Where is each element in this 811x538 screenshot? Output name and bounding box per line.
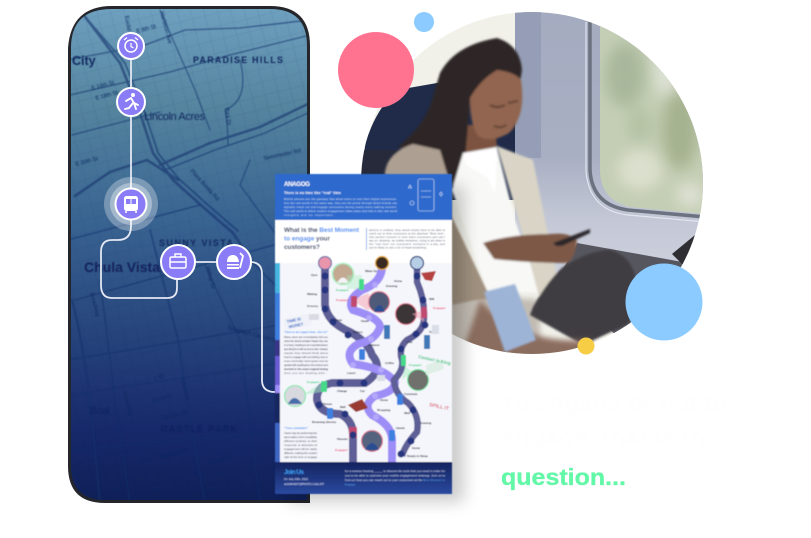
- side paragraph: time available: right at the time to engage: [284, 455, 317, 459]
- side paragraph: when is urgent: "How to let urgent time...fire in!": [284, 330, 329, 334]
- intro paragraph: the "real time" our customers' moments in a day, and: [369, 242, 446, 246]
- side paragraph: when is urgent: spending time with someone else. Instead,: [284, 347, 328, 351]
- engaged labels: Engaged: [433, 306, 445, 310]
- document shadow: [288, 186, 464, 502]
- map labels: Plaza Bonita Rd: [189, 168, 220, 202]
- route node: food: [217, 245, 251, 279]
- portraits and scene photos: [284, 256, 428, 452]
- side paragraph: time available: "Time available": [284, 426, 309, 430]
- document header: ANAGOG: [284, 181, 310, 188]
- side paragraph: when is urgent: Many users are immediately told you: [284, 335, 328, 339]
- sticker: time is money: MONEY: [288, 321, 304, 329]
- road labels: Wifi: [429, 297, 434, 301]
- road labels: Browsing Service: [312, 420, 337, 424]
- document header: digitally reach out and engage consumers during nearly every waking moment.: [284, 205, 397, 209]
- document footer: you to be able to optimize your mobile engagement strategy. Join us to: [345, 474, 445, 478]
- phone body: [68, 6, 310, 503]
- map labels: Broadway: [121, 391, 133, 417]
- intro paragraph: you're likely to see a lot of head-scratching.: [369, 246, 427, 250]
- intro paragraph: activity in unlikely, they would simply have to be able to: [369, 228, 446, 232]
- document footer: Join Us: [284, 469, 304, 476]
- side paragraph: time available: same action, but in completely: [284, 435, 318, 439]
- winding road: slate left: [317, 262, 377, 462]
- woman figure: [385, 38, 636, 345]
- engaged labels: Engaged: [335, 448, 347, 452]
- route node: alarm clock: [118, 33, 144, 59]
- phone markers on roads: [321, 279, 427, 441]
- map labels: [72, 11, 302, 467]
- side paragraph: time available: engagement will be vastly: [284, 447, 318, 451]
- side paragraph: when is urgent: worried in the exact original timing: [283, 367, 328, 371]
- map labels: Chula Vista: [84, 259, 160, 275]
- winding road: slate right: [394, 262, 424, 456]
- road labels: Traffic: [429, 330, 438, 334]
- road labels: Mall: [340, 405, 346, 409]
- question text: To engage or not to: [501, 390, 727, 416]
- engaged labels: Engaged: [409, 363, 421, 367]
- road labels: [307, 269, 438, 458]
- road labels: Dawn: [361, 319, 369, 323]
- route node: briefcase: [161, 245, 195, 279]
- map labels: Oxford St: [208, 455, 233, 467]
- hands: [483, 234, 577, 263]
- document header: Mobile phones are the gateway that allow users to visit their digital experience.: [284, 197, 397, 201]
- side paragraph: when is urgent: greeted with anything from the environment: [284, 363, 328, 367]
- document header: There is no time like "real" time: [284, 191, 341, 195]
- title divider: [365, 228, 368, 250]
- route node: running person: [117, 88, 145, 116]
- infographic document: [275, 174, 452, 494]
- jacket lapel: [497, 146, 560, 300]
- photo: woman on train: [360, 8, 708, 360]
- road labels: Grocery: [307, 304, 318, 308]
- road labels: Bakery: [353, 330, 363, 334]
- road labels: Waking: [307, 292, 317, 296]
- map labels: E 16th St: [91, 80, 115, 92]
- side paragraph: when is urgent: even minimally interrupted and be: [284, 359, 328, 363]
- jacket lower left: [452, 217, 490, 305]
- side paragraph: when is urgent: in a hurry, heading to an important lesson: [284, 343, 328, 347]
- question text: question...: [501, 464, 626, 490]
- side paragraph: time available: [284, 426, 318, 459]
- face: [470, 70, 522, 139]
- map labels: City: [72, 54, 96, 68]
- side paragraph: time available: response to attempts at: [284, 443, 317, 447]
- road labels: Ready to Sleep: [407, 454, 428, 458]
- decorative circle: small blue: [414, 12, 434, 32]
- decorative circle: pink: [338, 32, 414, 108]
- document header: [275, 174, 452, 220]
- map labels: Moss St: [152, 393, 173, 404]
- side colour tabs: [275, 263, 280, 462]
- eyes and lips: [490, 101, 518, 127]
- map roads: [68, 10, 310, 503]
- side paragraph: when is urgent: maybe they should think about: [284, 351, 328, 355]
- map labels: Broadway: [88, 292, 100, 318]
- road stops: [316, 272, 428, 458]
- engaged labels: [307, 288, 445, 452]
- journey board background: [275, 263, 452, 462]
- map labels: Telegraph Canyon Rd: [226, 325, 280, 345]
- road labels: Commute: [404, 392, 418, 396]
- document footer: find out how you can reach out to your customers at the Best Moment to: [345, 478, 445, 482]
- engaged labels: Engaged: [336, 298, 348, 302]
- map labels: Lincoln Acres: [144, 111, 206, 123]
- dark seat handle: [672, 235, 695, 264]
- road labels: Shopping: [377, 408, 391, 412]
- document title: What is the Best Moment: [284, 227, 360, 234]
- road labels: Home: [380, 398, 388, 402]
- road labels: Evening: [386, 284, 397, 288]
- document footer: On July 19th, 2022: [284, 477, 308, 481]
- map labels: CASTLE PARK: [161, 424, 238, 434]
- shirt: [452, 148, 540, 292]
- map labels: Boal: [90, 405, 110, 417]
- engaged labels: Engaged: [336, 288, 348, 292]
- intro paragraph: say no. However, as mobile marketers, trying to pin when is: [369, 238, 446, 242]
- side paragraph: when is urgent: then you are dealing with...: [284, 371, 328, 375]
- header phone diagram: [408, 179, 442, 211]
- map labels: E 30th St: [75, 156, 99, 168]
- hair back: [398, 38, 522, 190]
- map labels: Sweetwater Rd: [263, 148, 302, 162]
- map labels: Rea Dr: [223, 107, 231, 126]
- neck: [464, 124, 498, 154]
- smartphone: [553, 229, 590, 246]
- road labels: Coffee: [385, 361, 394, 365]
- sticker: time is money: [283, 313, 312, 331]
- document title: [284, 227, 360, 251]
- document title: to engage your: [284, 236, 330, 242]
- side paragraph: time available: different, making the context: [284, 451, 317, 455]
- trousers: [530, 250, 636, 345]
- question text: engage, that is the: [501, 424, 719, 450]
- document footer: at 10AM EST (5PM IST) 1 CALL IST: [284, 482, 324, 486]
- map labels: Palomar St: [159, 448, 188, 461]
- engaged labels: Engaged: [307, 380, 319, 384]
- map labels: PARADISE HILLS: [193, 55, 284, 65]
- document footer: [275, 462, 452, 494]
- decorative circle: yellow: [578, 338, 594, 354]
- document header: insights are so important.: [284, 213, 334, 217]
- icons: buildings and buses: [309, 271, 444, 412]
- intro paragraph: that perfect moment in time when customers just can't: [369, 235, 445, 239]
- map labels: E 8th St: [136, 24, 157, 35]
- side paragraph: when is urgent: [283, 330, 329, 375]
- road labels: Evening: [420, 421, 431, 425]
- road labels: Home: [412, 446, 420, 450]
- document footer: Engage.: [345, 482, 356, 486]
- side paragraph: when is urgent: when the device is bright. Maybe they are: [284, 339, 328, 343]
- lower cabin wall: [564, 243, 684, 334]
- blurred foreground phone and hand: [464, 283, 595, 354]
- jacket left: [385, 144, 490, 300]
- road labels: Wait: [404, 411, 410, 415]
- sticker: spill: SPILL IT: [429, 402, 449, 412]
- phone with map: [68, 6, 310, 503]
- map labels: Third Ave: [178, 377, 190, 401]
- road labels: Home: [394, 279, 402, 283]
- intro paragraph: [369, 228, 446, 250]
- road labels: Home: [334, 318, 342, 322]
- road labels: Gym: [311, 273, 318, 277]
- side paragraph: time available: Users may be performing the: [284, 431, 317, 435]
- sticker: time is money: TIME IS: [286, 316, 302, 324]
- document title: customers?: [284, 244, 320, 251]
- road labels: Car: [360, 389, 366, 393]
- document footer: for a session hosting _____ to discuss the tools that you need in order for: [345, 469, 445, 473]
- window with blurred greenery: [600, 26, 703, 214]
- intro paragraph: reach out to their customers at the absolute "Best time",: [369, 232, 445, 236]
- decorative circle: large blue: [626, 264, 702, 340]
- road labels: Address: [368, 343, 380, 347]
- map labels: L St: [154, 373, 165, 382]
- map labels: E 18th St: [95, 90, 119, 102]
- map labels: SUNNY VISTA: [159, 238, 234, 248]
- map screen: [71, 9, 307, 500]
- road labels: Lunch: [347, 371, 356, 375]
- map labels: Hilltop Dr: [204, 266, 216, 290]
- train window frame: [515, 8, 705, 278]
- document header: The real world is where modern engagement takes place and that is why real world: [284, 209, 398, 213]
- shirt collar: [463, 145, 498, 186]
- road labels: Wake Up: [365, 269, 377, 273]
- seat lower: [452, 296, 543, 354]
- purple road stops: [350, 282, 384, 420]
- side paragraph: when is urgent: how to engage with something new or: [284, 355, 328, 359]
- road labels: Charge: [337, 389, 347, 393]
- road labels: Hands: [396, 426, 405, 430]
- route node: bus with halo: [104, 177, 158, 231]
- sticker: contact is king: Contact is King: [418, 354, 451, 366]
- road labels: Dinner: [323, 402, 333, 406]
- map labels: Euclid: [123, 15, 132, 31]
- map labels: Harbison Ave: [158, 11, 172, 45]
- side paragraph: time available: different contexts, so their: [284, 439, 317, 443]
- armrest: [603, 281, 660, 310]
- question text: [501, 390, 727, 490]
- route line: [101, 46, 275, 392]
- road labels: Parents: [337, 437, 348, 441]
- document header: Into the real world in the same way, they are the portal through which brands can: [284, 201, 398, 205]
- map labels: Naples St: [163, 410, 188, 422]
- winding road: purple middle: [349, 262, 395, 462]
- road labels: Gas: [407, 340, 413, 344]
- wall and seat background: [361, 13, 614, 342]
